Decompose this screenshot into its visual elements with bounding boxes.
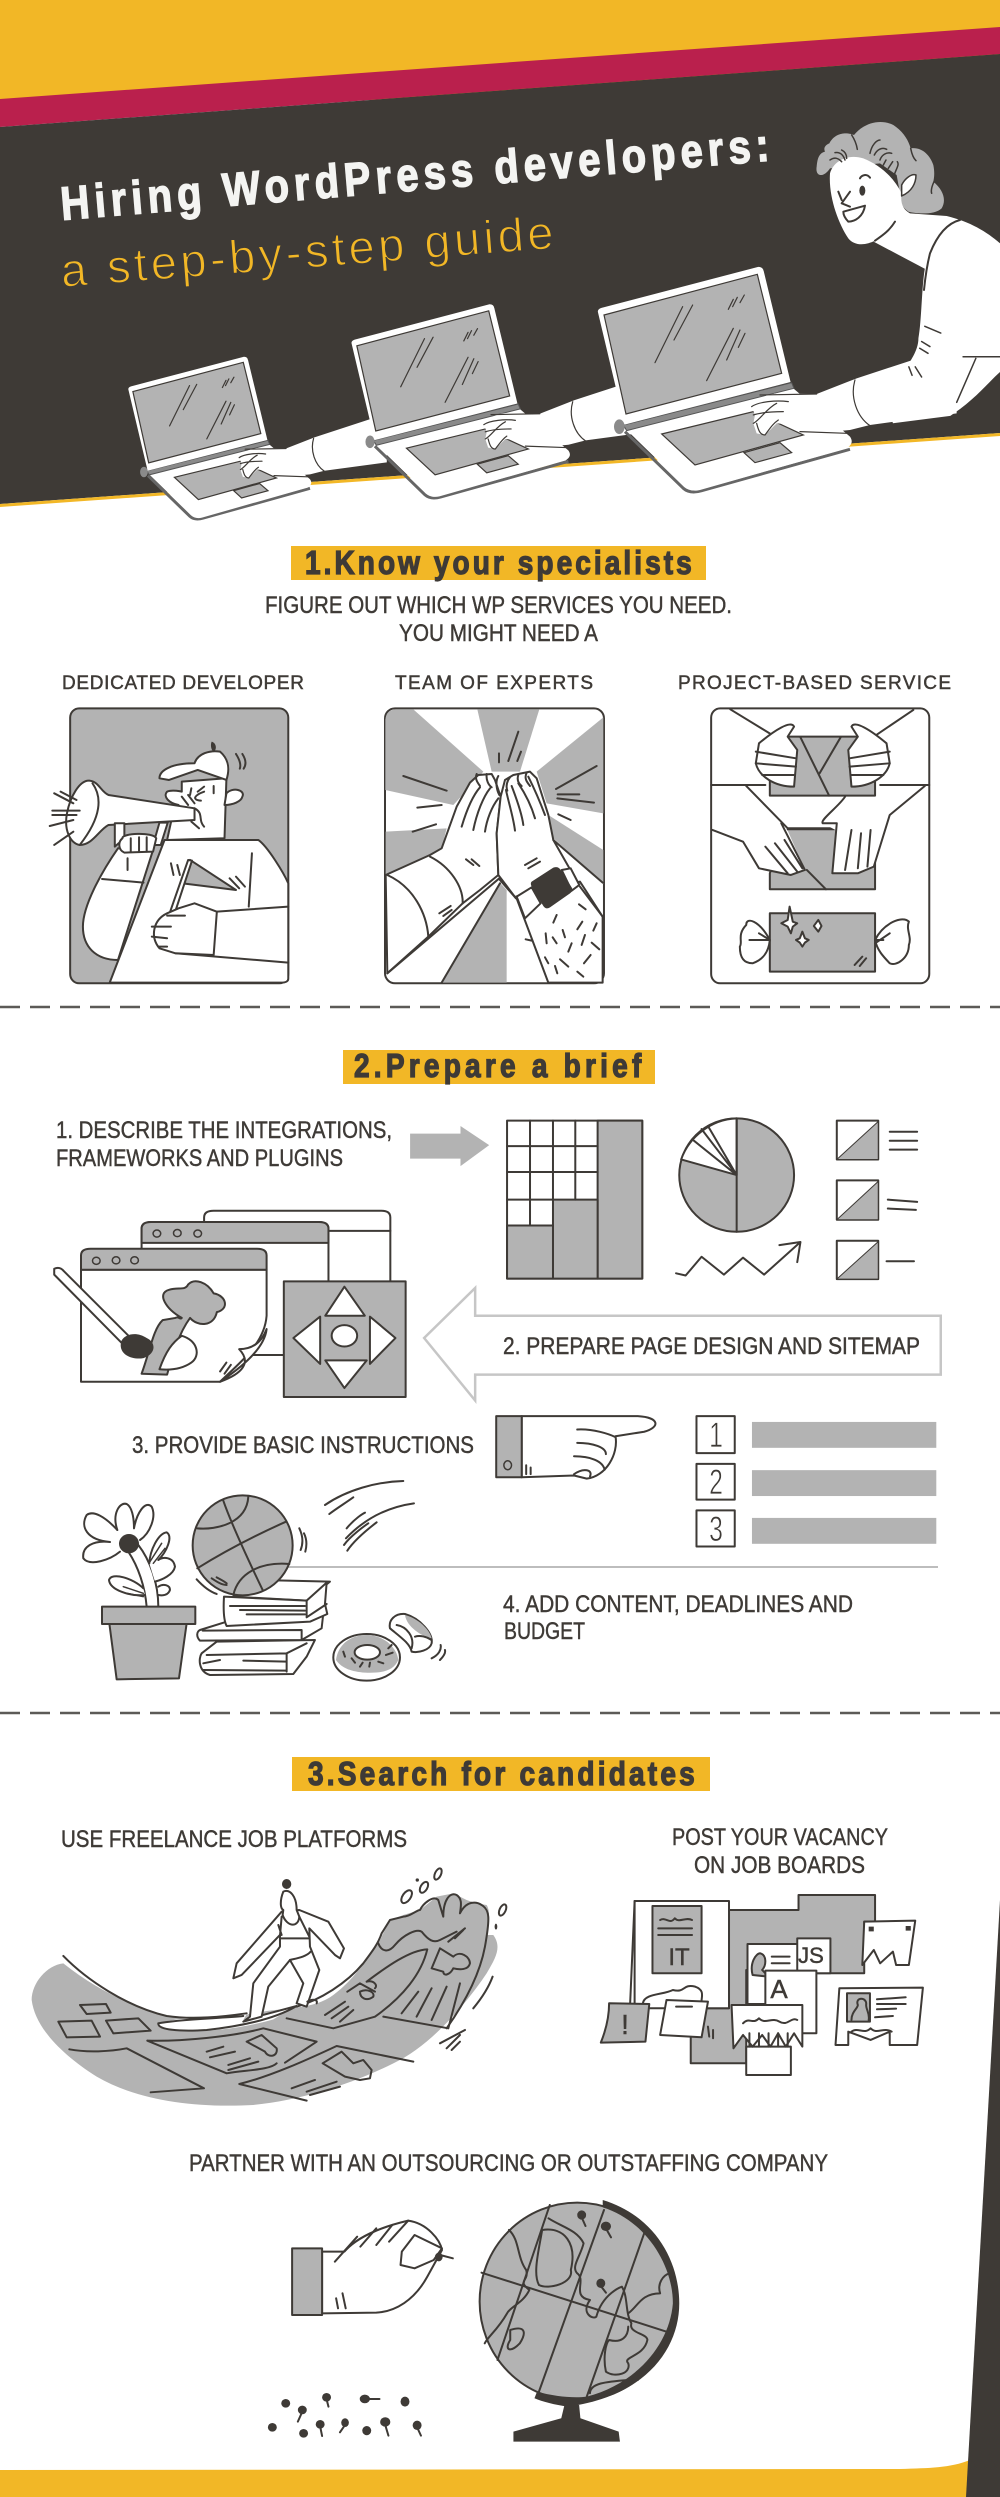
step 4 text: 4. ADD CONTENT, DEADLINES AND — [503, 1591, 853, 1618]
step 1 text — [56, 1117, 392, 1172]
illustration: person head — [816, 122, 1000, 290]
flower pot — [102, 1607, 195, 1679]
bottom yellow band — [0, 2460, 970, 2497]
title: Hiring WordPress developers: — [59, 120, 771, 231]
checklist numbers: 2 — [709, 1461, 723, 1502]
laptop small — [129, 357, 311, 519]
checklist bars — [752, 1422, 936, 1544]
label: job boards: POST YOUR VACANCY — [672, 1824, 888, 1851]
divider 2 — [0, 1712, 1000, 1714]
board text: JS — [798, 1943, 824, 1968]
laptop large — [598, 267, 852, 492]
checklist numbers — [709, 1414, 723, 1549]
globe arc and stand — [513, 2200, 679, 2442]
chart: stacked grid — [507, 1121, 642, 1279]
arm large — [752, 346, 957, 435]
illustration: surfer on wave of job listings — [32, 1867, 508, 2106]
label: project-based service: PROJECT-BASED SERVICE — [678, 673, 951, 694]
divider 1 — [0, 1006, 1000, 1008]
step 1 text: FRAMEWORKS AND PLUGINS — [56, 1145, 343, 1172]
step 4 text — [503, 1591, 853, 1645]
icon: pointing hand — [496, 1416, 655, 1479]
icon: loose pins — [268, 2393, 422, 2438]
checklist numbers: 1 — [709, 1414, 723, 1455]
step 2 text: 2. PREPARE PAGE DESIGN AND SITEMAP — [503, 1333, 920, 1360]
step 1 text: 1. DESCRIBE THE INTEGRATIONS, — [56, 1117, 392, 1144]
person body — [874, 216, 1000, 423]
subtitle: a step-by-step guide — [59, 205, 555, 297]
right edge dark band — [966, 1900, 1000, 2497]
label: freelance platforms: USE FREELANCE JOB PLATFORMS — [61, 1826, 407, 1853]
chart: globe — [480, 2203, 675, 2401]
checklist numbers: 3 — [709, 1508, 723, 1549]
wave — [32, 1893, 497, 2106]
illustration: job board collage — [601, 1895, 923, 2075]
label: job boards — [672, 1824, 888, 1879]
label: job boards: ON JOB BOARDS — [694, 1852, 865, 1879]
board text — [621, 1943, 824, 2040]
checklist boxes — [696, 1416, 735, 1546]
arrow: outlined left — [424, 1288, 941, 1401]
wave outlines and listings — [58, 1894, 493, 2101]
books — [197, 1580, 330, 1675]
laptop medium — [352, 305, 570, 498]
surfer — [233, 1879, 344, 2022]
label: outsourcing: PARTNER WITH AN OUTSOURCING OR OUTSTAFFING COMPANY — [189, 2150, 828, 2177]
board text: IT — [668, 1944, 690, 1971]
panel: team of experts — [385, 708, 604, 983]
intro text: FIGURE OUT WHICH WP SERVICES YOU NEED. — [265, 592, 732, 619]
flower — [83, 1504, 175, 1607]
surfboard — [158, 2005, 297, 2031]
step 4 rule — [285, 1566, 938, 1568]
donut — [333, 1634, 400, 1681]
step 3 text: 3. PROVIDE BASIC INSTRUCTIONS — [132, 1432, 474, 1459]
chart: pie — [679, 1118, 794, 1232]
heading: section 3: 3.Search for candidates — [308, 1756, 695, 1793]
ball — [193, 1495, 306, 1595]
panel: dedicated developer — [50, 708, 288, 983]
spray — [399, 1867, 508, 1930]
panel: project-based service — [711, 708, 929, 983]
board text: ! — [621, 2009, 629, 2040]
intro text — [265, 592, 732, 647]
intro text: YOU MIGHT NEED A — [399, 620, 598, 647]
donut bite and motion lines — [325, 1481, 445, 1660]
board text: A — [770, 1974, 788, 2004]
illustration: flower, ball, books and donut — [83, 1481, 445, 1681]
label: team of experts: TEAM OF EXPERTS — [395, 673, 593, 694]
heading: section 1: 1.Know your specialists — [305, 545, 692, 582]
label: dedicated developer: DEDICATED DEVELOPER — [62, 673, 304, 694]
icon: direction pad — [284, 1281, 406, 1397]
arm small — [239, 414, 387, 478]
illustration: browser windows — [54, 1211, 390, 1382]
illustrations: section 2 — [54, 1118, 941, 1546]
arrow: grey right — [410, 1126, 489, 1166]
arm medium — [484, 372, 660, 449]
heading: section 2: 2.Prepare a brief — [354, 1048, 642, 1085]
chart: zigzag arrow — [676, 1242, 800, 1276]
header background — [0, 0, 1000, 507]
icons: legend squares — [837, 1121, 917, 1279]
icon: hand holding pin — [292, 2221, 453, 2315]
step 4 text: BUDGET — [504, 1618, 585, 1645]
illustration: laptops and typing arms — [129, 216, 1000, 519]
